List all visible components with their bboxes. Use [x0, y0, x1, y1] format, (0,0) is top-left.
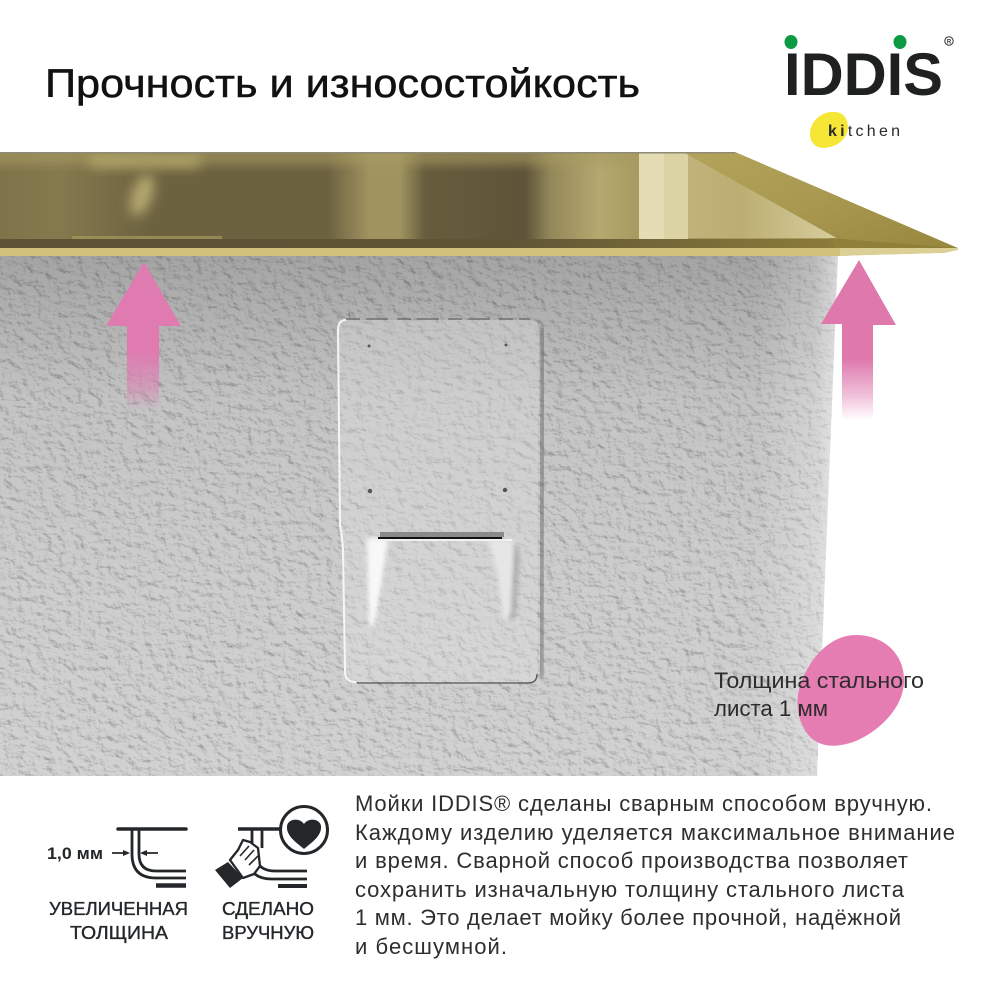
- text block: description: Мойки IDDIS® сделаны сварным способом вручную.: [355, 791, 932, 816]
- icon: handmade: [215, 806, 328, 888]
- logo: IDDIS kitchen: IDDIS: [784, 41, 943, 108]
- logo: IDDIS kitchen: kitchen: [828, 123, 900, 140]
- label: 1,0 мм: 1,0 мм: [47, 844, 103, 863]
- logo: IDDIS kitchen: [784, 35, 953, 148]
- label: increased thickness: [49, 899, 188, 943]
- label: handmade: СДЕЛАНО: [222, 899, 314, 919]
- callout: steel thickness: листа 1 мм: [714, 696, 828, 721]
- text block: description: Каждому изделию уделяется максимальное внимание: [355, 820, 955, 845]
- text block: description: сохранить изначальную толщину стального листа: [355, 877, 905, 902]
- pink blob: [797, 635, 904, 746]
- callout: steel thickness: Толщина стального: [714, 668, 924, 693]
- callout: steel thickness: [714, 668, 924, 721]
- plate pocket: [367, 532, 520, 626]
- title: Прочность и износостойкость: [45, 62, 640, 106]
- label: increased thickness: УВЕЛИЧЕННАЯ: [49, 899, 188, 919]
- icon: thickness: [112, 829, 186, 886]
- icon: hand: [215, 840, 260, 888]
- label: handmade: [222, 899, 314, 943]
- arrow: left: [106, 262, 181, 410]
- icon: heart badge: [280, 806, 328, 854]
- bowl reflections: [0, 154, 604, 239]
- photo: sink underside body: [0, 255, 840, 777]
- plate holes: [368, 344, 508, 493]
- text block: description: [355, 791, 955, 959]
- text block: description: 1 мм. Это делает мойку более прочной, надёжной: [355, 905, 901, 930]
- text block: description: и время. Сварной способ производства позволяет: [355, 848, 908, 873]
- label: handmade: ВРУЧНУЮ: [222, 923, 314, 943]
- arrow: right: [821, 260, 896, 420]
- mounting plate: [338, 319, 543, 683]
- photo: gold sink rim and bowl: [0, 150, 958, 256]
- label: increased thickness: ТОЛЩИНА: [70, 923, 168, 943]
- logo: IDDIS kitchen: R: [947, 40, 952, 46]
- text block: description: и бесшумной.: [355, 934, 507, 959]
